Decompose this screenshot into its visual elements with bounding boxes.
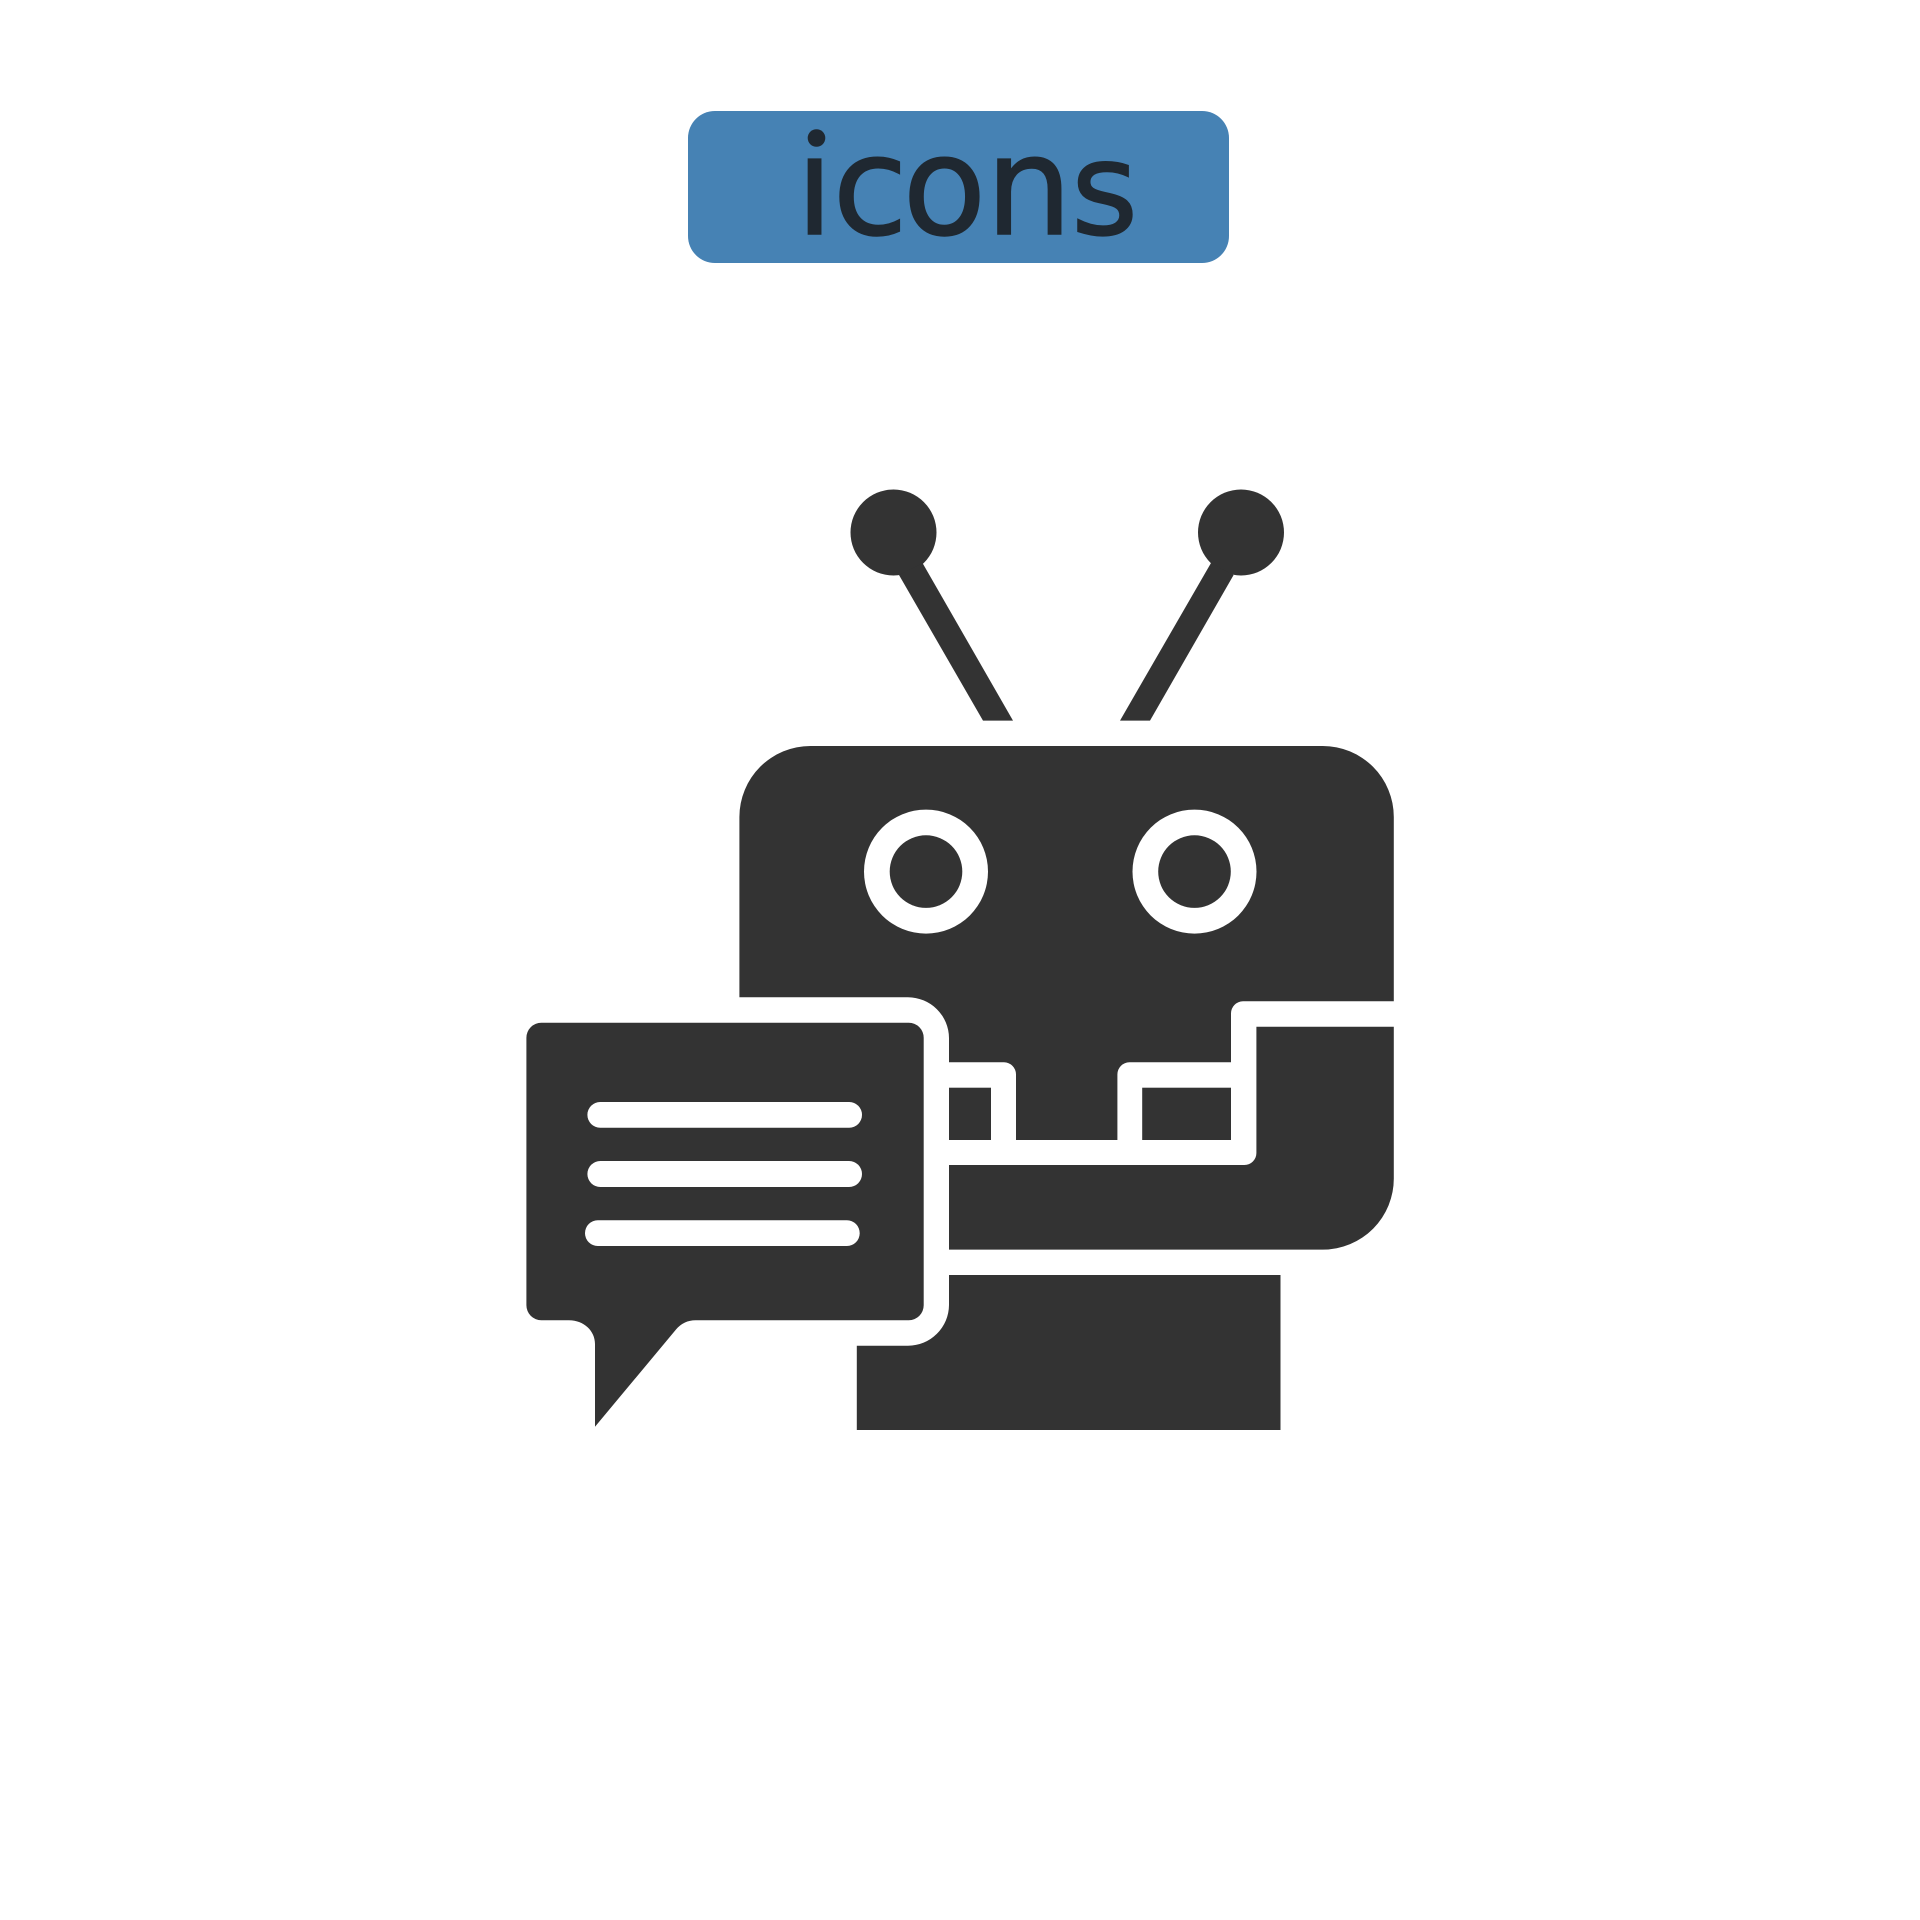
badge: icons label: s [1071,115,1138,265]
badge: icons label: icon [796,108,1072,267]
text line 2 [587,1161,862,1187]
robot head [739,746,1394,1140]
robot body [857,1275,1280,1430]
right eye [1132,810,1256,934]
robot jaw [949,1027,1394,1250]
text line 3 [585,1220,860,1246]
badge: icons label [688,108,1229,267]
robot mouth right tooth [1142,1088,1231,1140]
icon: chatbot robot with speech bubble [526,490,1394,1430]
text line 1 [587,1102,862,1128]
robot mouth left tooth [949,1088,991,1140]
right antenna [1120,490,1284,721]
speech bubble [526,1023,924,1427]
left eye [864,810,988,934]
left antenna [850,490,1013,721]
